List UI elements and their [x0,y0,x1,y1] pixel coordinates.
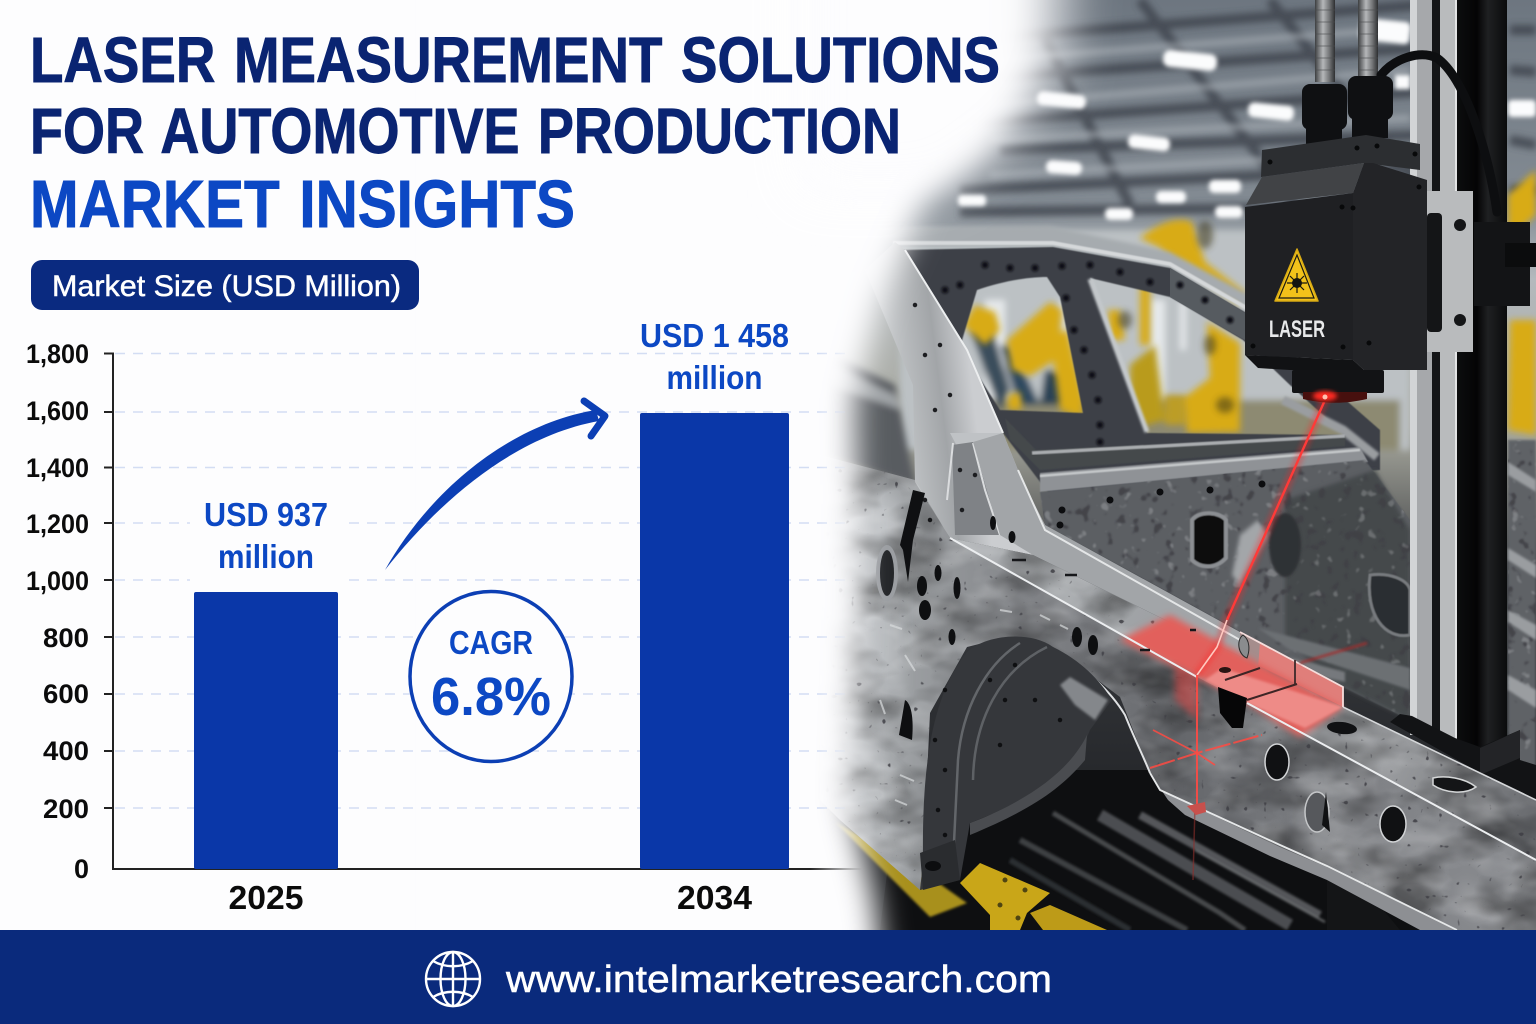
bar 2025 [190,490,342,916]
red lit flange end [1240,632,1343,707]
factory background [828,0,1536,930]
rail top face [950,538,1536,860]
LASER label: LASER [1269,316,1325,343]
y axis labels: 1,000 [26,566,89,596]
CAGR circle [410,592,572,762]
metal texture [839,462,1536,930]
market size badge [31,260,419,310]
metal hoses [1315,0,1378,82]
column base [1390,714,1536,799]
grid lines [115,354,855,808]
dark blobs on robots [1118,221,1234,413]
laser sensor unit [1245,0,1536,403]
x axis [112,868,862,870]
bar 2034: 2034 [677,879,753,916]
yellow robots [963,170,1536,435]
y axis labels: 1,600 [26,396,89,426]
y axis labels: 800 [43,623,89,653]
website url: www.intelmarketresearch.com [505,959,1052,1001]
title line 1: LASER MEASUREMENT SOLUTIONS [30,24,1000,96]
bar 2025: 2025 [228,879,304,916]
bar 2025: million [218,538,314,575]
market size badge: Market Size (USD Million) [52,270,401,303]
light patches on side face [864,493,1532,930]
car roof frame, windows and pillars [880,226,1380,495]
lens [1292,370,1384,403]
y axis labels [26,339,89,884]
red lit top face [1120,615,1343,737]
edge highlights [950,538,1536,860]
sensor housing right side [1353,163,1427,370]
photo: laser sensor measuring car body in factory [827,0,1536,930]
vertical aluminium and black column [1390,0,1536,810]
lower sill strip [1159,786,1455,930]
ceiling lights [958,17,1536,220]
bar 2034 [640,317,789,916]
pillar and frame holes [945,265,1230,442]
faded front body behind the A pillar [837,363,915,480]
laser lines [1150,400,1367,880]
blurred plant seen through the windows [900,230,1410,450]
mounting bracket and clamp [1427,191,1536,352]
connectors [1302,76,1393,144]
housing screws [1253,146,1419,347]
y axis labels: 0 [74,854,89,884]
y axis labels: 200 [43,794,89,824]
floor rails and yellow fixture [840,770,1420,930]
bar 2034: million [666,359,762,396]
y axis labels: 1,400 [26,453,89,483]
rear wheel arch [920,636,1112,890]
yellow fixture [835,822,967,917]
growth arrow [385,401,605,570]
sensor housing chamfer [1246,163,1364,205]
laser warning triangle [1275,249,1318,301]
soft white haze over the top of the photo edge [800,0,1070,190]
y axis [104,354,113,869]
bar chart [26,317,862,916]
title line 3: market insights: MARKET INSIGHTS [30,167,575,242]
icon: globe [426,952,480,1006]
flange end [920,840,960,890]
flange running to notch [973,433,1243,658]
large interior opening [1192,513,1226,566]
car body side panel and front rail [829,243,1536,930]
interior panel with holes [1040,440,1536,770]
sensor housing front [1245,193,1353,360]
black cable [1381,55,1497,212]
A pillar [865,242,1045,555]
bar 2025: USD 937 [204,496,328,533]
y axis labels: 400 [43,736,89,766]
title [30,24,1000,242]
white fade from chart area into photo [400,0,1025,980]
y axis labels: 600 [43,679,89,709]
CAGR circle: CAGR [449,624,533,661]
footer bar [0,930,1536,1024]
belt rails [1005,418,1345,470]
sensor housing lid [1261,135,1420,177]
y axis labels: 1,800 [26,339,89,369]
holes in car body [876,490,1476,842]
y axis labels: 1,200 [26,509,89,539]
title line 2: FOR AUTOMOTIVE PRODUCTION [30,95,901,167]
bar 2034: USD 1 458 [640,317,789,354]
CAGR circle: 6.8% [431,667,551,727]
